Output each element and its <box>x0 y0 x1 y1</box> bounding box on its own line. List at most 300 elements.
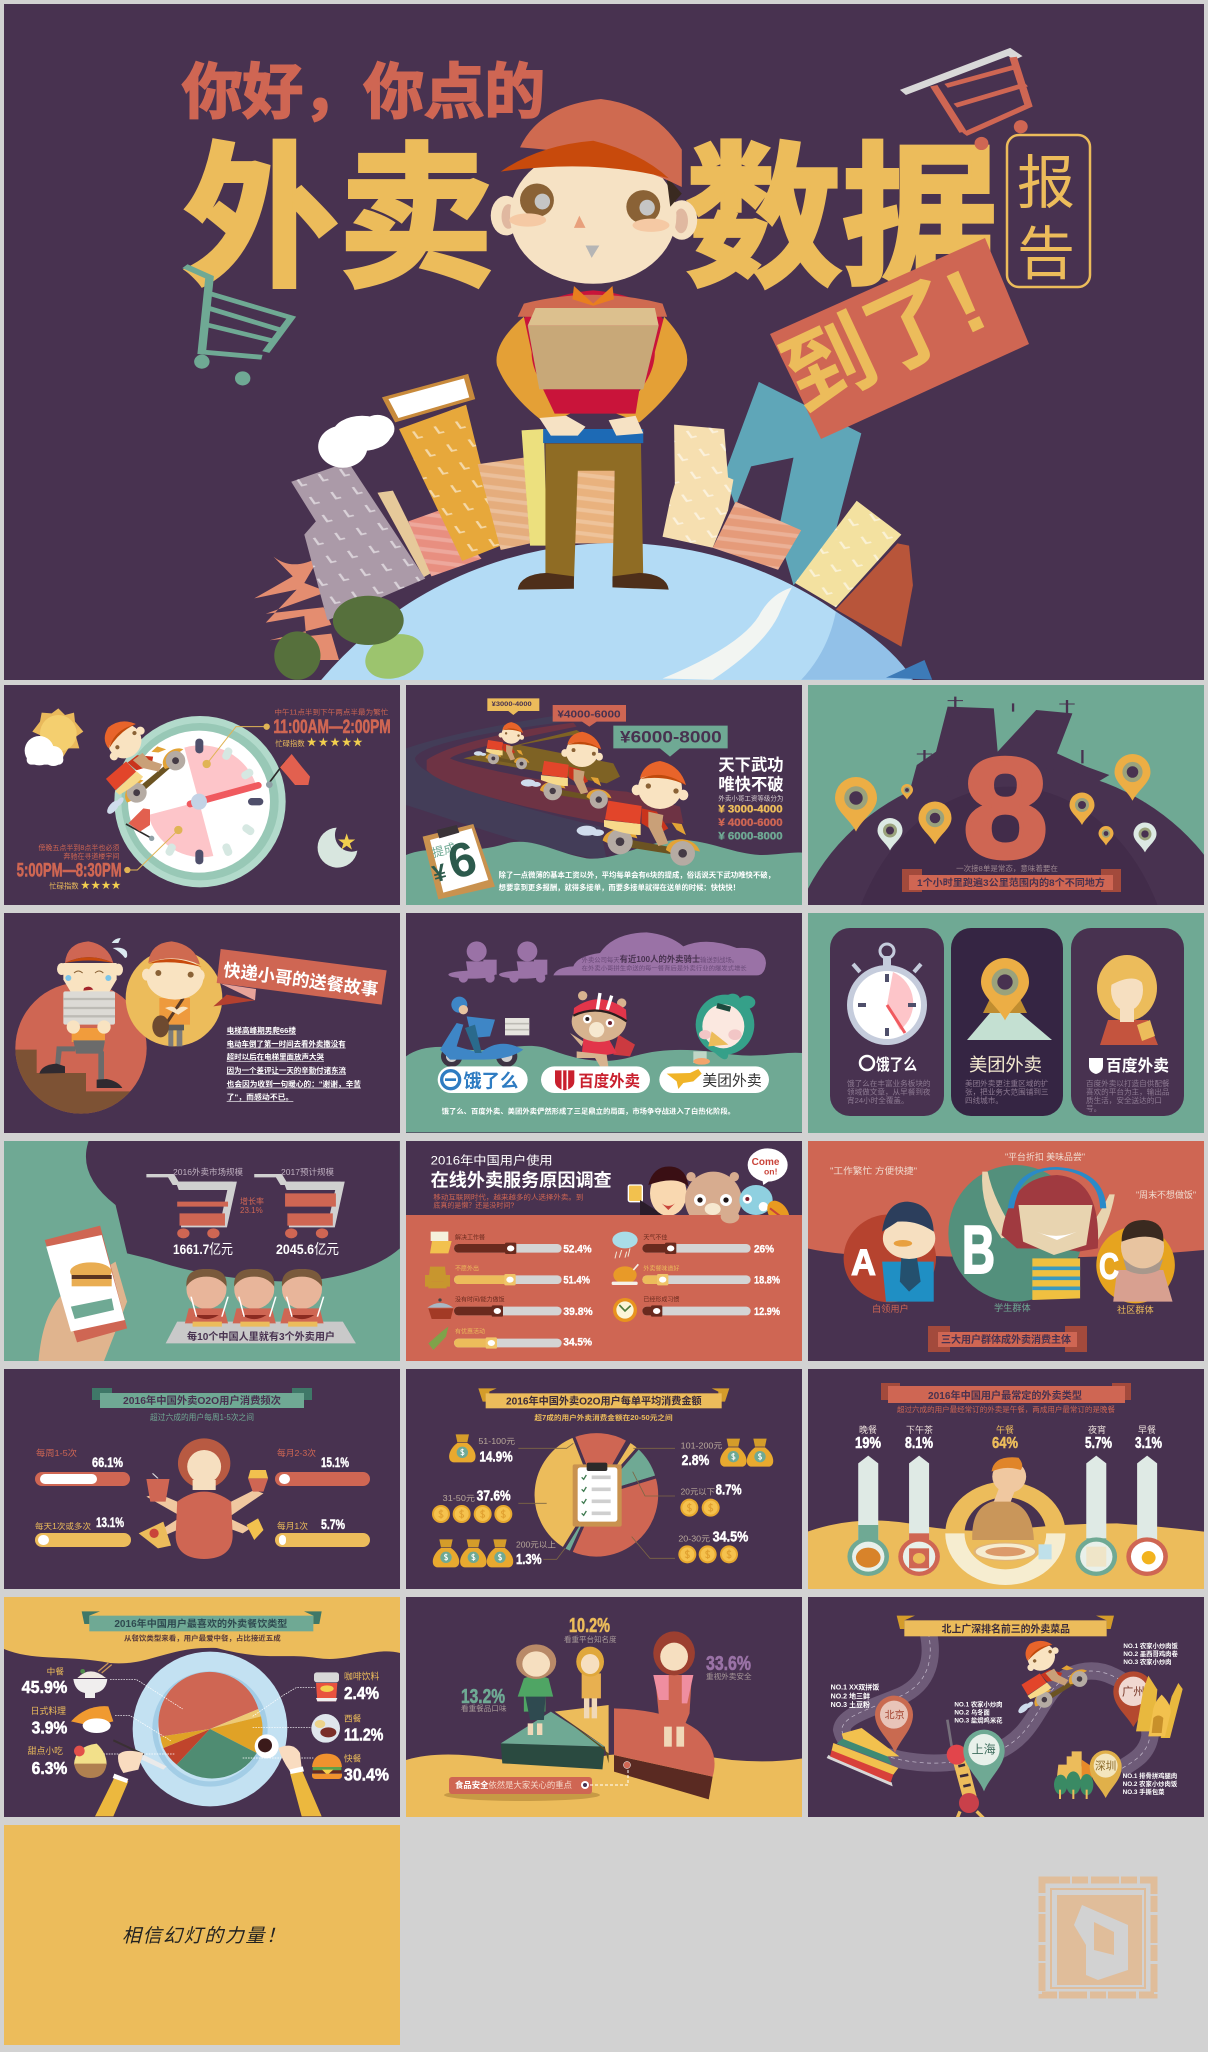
text block: ele.me description: 领域做文章，从早餐到夜 <box>847 1086 931 1096</box>
icon: money bags <box>433 1434 773 1567</box>
pin: guangzhou: 广州 <box>1122 1685 1145 1698</box>
icon: church <box>1136 1676 1183 1738</box>
icon: businesswoman <box>1097 955 1158 1045</box>
text block: afternoon tea <box>905 1424 933 1452</box>
text block: commission description: 想要拿到更多报酬，就得多接单，而要多接单就得在送单的时候：快快快！ <box>499 883 740 892</box>
icon: large rider <box>577 761 700 866</box>
chart: reason work meal <box>454 1234 592 1256</box>
pin: beijing <box>875 1696 913 1753</box>
logo: ele.me <box>860 1055 917 1074</box>
banner: food ribbon: 2016年中国用户最喜欢的外卖餐饮类型 <box>114 1618 288 1630</box>
panel: eight places <box>808 685 1204 905</box>
text block: story lines: 电梯高峰期男爬66楼 <box>227 1026 297 1035</box>
text block: beijing dishes: NO.2 地三鲜 <box>831 1691 870 1700</box>
text block: slogan and salary levels: 唯快不破 <box>718 775 784 794</box>
text block: dinner peak: 忙碌指数 <box>49 881 79 890</box>
text block: fast food <box>344 1752 389 1784</box>
text block: shenzhen dishes: NO.3 手撕包菜 <box>1123 1787 1165 1796</box>
text block: guangzhou dishes: NO.1 农家小炒肉饭 <box>1123 1641 1179 1650</box>
icon: western dish <box>311 1714 340 1743</box>
icon: roast chicken <box>612 1264 638 1285</box>
chart: reason promotion: 34.5% <box>563 1337 592 1349</box>
panel: three user groups <box>808 1141 1204 1361</box>
callout: food safety pill <box>444 1762 630 1801</box>
text: quotes: "平台折扣 美味品尝" <box>1005 1151 1085 1162</box>
text block: lunch: 64% <box>992 1435 1018 1452</box>
icon: scenery and illustration (stretched coordinates) <box>185 52 1028 1317</box>
illustration: speech bubble <box>86 1141 400 1282</box>
chart: reason promotion <box>454 1327 592 1349</box>
logo: meituan pill: 美团外卖 <box>702 1072 762 1089</box>
banner: spend ribbon: 2016年中国外卖O2O用户每单平均消费金额 <box>506 1394 702 1407</box>
callout: medium salary tag: ¥4000-6000 <box>557 709 621 720</box>
icon: clipboard commission: 提成 <box>430 840 457 860</box>
text block: above 200: 1.3% <box>516 1552 542 1568</box>
icon: wall clock <box>613 1298 637 1322</box>
text block: meituan description <box>965 1078 1049 1105</box>
text block: dinner <box>855 1424 881 1452</box>
text block: beijing dishes: NO.3 土豆粉 <box>831 1700 870 1709</box>
title: survey heading: 在线外卖服务原因调查 <box>431 1171 612 1191</box>
banner: main consumers <box>928 1326 1087 1352</box>
text block: dinner peak: 5:00PM—8:30PM <box>17 860 122 881</box>
illustration: bear mascot <box>570 991 635 1066</box>
text block: beijing dishes <box>831 1683 879 1709</box>
callout: medium salary tag <box>553 705 626 727</box>
icon: coins <box>432 1499 738 1563</box>
illustration: green mascot <box>693 994 755 1065</box>
chart: reason weather: 26% <box>754 1244 774 1256</box>
illustration: tired courier <box>39 938 127 1088</box>
chart: reason habit: 已经形成习惯 <box>643 1296 679 1304</box>
panel: favourite meal time <box>808 1369 1204 1589</box>
chart: spend pie <box>533 1432 660 1558</box>
pin: shenzhen <box>1090 1750 1122 1798</box>
banner: places ribbon <box>902 869 1121 892</box>
icon: coffee cup <box>255 1734 279 1758</box>
text block: 33.6 percent <box>706 1653 752 1681</box>
text: quotes: "工作繁忙 方便快捷" <box>830 1165 917 1176</box>
text block: 20-30: 34.5% <box>713 1530 748 1546</box>
illustration: woman left <box>516 1644 556 1735</box>
chart: reason no time: 39.8% <box>563 1306 593 1318</box>
callout: food safety pill: 食品安全依然是大家关心的重点 <box>455 1780 572 1790</box>
text block: baidu description: 百度外卖以打造自供配餐 <box>1086 1078 1170 1088</box>
chart: reason no time <box>454 1296 593 1318</box>
panel: favourite food type <box>4 1597 400 1817</box>
chart: reason habit: 12.9% <box>754 1306 780 1318</box>
text block: 51-100: 51-100元 <box>478 1437 515 1446</box>
text block: cloud message: 在外卖小哥拼生命送的每一餐背后是外卖行业的爆发式增长 <box>582 964 747 972</box>
icon: sushi <box>71 1706 113 1733</box>
text: market values <box>173 1241 339 1257</box>
icon: pearl tower <box>947 1720 985 1820</box>
banner: food ribbon <box>82 1611 322 1631</box>
text block: 31-50 <box>443 1489 511 1505</box>
callout: small salary tag <box>487 698 539 715</box>
illustration: group C community <box>1096 1220 1175 1303</box>
text block: above 200: 200元以上 <box>516 1540 556 1549</box>
illustration: stretched shapes <box>807 1165 1204 1361</box>
text block: shanghai dishes <box>954 1699 1003 1724</box>
pin: shenzhen: 深圳 <box>1095 1760 1116 1772</box>
icon: moon and star <box>318 828 357 868</box>
text block: slogan and salary levels: ¥ 3000-4000 <box>718 804 783 816</box>
text block: lunch: 午餐 <box>996 1424 1014 1435</box>
panel: order frequency <box>4 1369 400 1589</box>
banner: places ribbon: 1个小时里跑遍3公里范围内的8个不同地方 <box>917 877 1106 889</box>
callout: come on bubble: on! <box>764 1166 778 1176</box>
text block: 31-50: 37.6% <box>477 1489 511 1505</box>
panel: courier story <box>4 913 400 1133</box>
panel section: coral body <box>406 1215 802 1361</box>
panel: hero cover <box>4 4 1204 680</box>
text: market values: 2045.6亿元 <box>276 1241 339 1257</box>
text: group letters: A <box>851 1242 876 1283</box>
text block: market labels: 2016外卖市场规模 <box>173 1166 243 1177</box>
pin: shanghai: 上海 <box>972 1742 996 1757</box>
text block: 51-100 <box>478 1437 515 1466</box>
text: group letters: B <box>962 1212 995 1288</box>
text block: lunch peak: 忙碌指数 <box>275 739 305 748</box>
callout: story ribbon <box>213 949 387 1006</box>
text block: 101-200 <box>681 1441 722 1469</box>
icon: clipboard commission <box>423 824 495 899</box>
text block: meituan description: 张，把业务大范围铺到三 <box>965 1086 1049 1096</box>
callout: story ribbon: 快递小哥的送餐故事 <box>222 960 379 1000</box>
chart: reason taste: 18.8% <box>754 1274 780 1286</box>
text block: breakfast <box>1135 1424 1162 1452</box>
banner: city ribbon: 北上广深排名前三的外卖菜品 <box>942 1622 1070 1635</box>
icon: shenzhen skyline and trees <box>1054 1751 1093 1799</box>
title: greeting line: 你好，你点的 <box>182 59 545 126</box>
text block: 51-100: 14.9% <box>479 1450 513 1466</box>
text block: shanghai dishes: NO.3 盐焗鸡米花 <box>954 1715 1003 1724</box>
chart: reason weather <box>642 1234 774 1256</box>
text block: meituan description: 美团外卖更注重区域的扩 <box>965 1078 1049 1088</box>
text: growth rate: 23.1% <box>240 1206 263 1215</box>
text block: baidu description: 质生活，安全送达的口 <box>1086 1095 1162 1105</box>
icon: pot <box>427 1298 453 1319</box>
banner: city ribbon <box>897 1616 1114 1636</box>
illustration: bear chin over edge <box>721 1210 739 1223</box>
text block: shenzhen dishes: NO.2 农家小炒肉饭 <box>1123 1779 1178 1788</box>
pin: guangzhou <box>1113 1671 1153 1727</box>
text block: shanghai dishes: NO.2 乌冬面 <box>954 1707 991 1716</box>
text block: below 20: 20元以下 <box>681 1487 715 1496</box>
illustration: planet <box>230 543 1003 1317</box>
illustration: right hand <box>278 1746 322 1816</box>
illustration: left hand with chopsticks <box>95 1740 167 1816</box>
callout: large salary tag <box>613 726 728 757</box>
pin: beijing: 北京 <box>885 1708 905 1721</box>
text block: guangzhou dishes: NO.2 墨西哥鸡肉卷 <box>1123 1649 1179 1658</box>
report badge: 告 <box>1017 222 1075 287</box>
text block: ele.me description <box>847 1078 931 1105</box>
panel: salary levels <box>406 685 802 905</box>
chart: reason promotion: 有优惠活动 <box>455 1327 485 1335</box>
text block: guangzhou dishes <box>1123 1641 1179 1666</box>
illustration: trees and boat <box>274 596 932 683</box>
illustration: right buildings <box>663 382 913 647</box>
text block: chinese food: 中餐 <box>47 1666 64 1677</box>
panel: closing slide <box>4 1825 400 2045</box>
chart: monthly 2-3 <box>275 1448 370 1486</box>
text block: market caption: 饿了么、百度外卖、美团外卖俨然形成了三足鼎立的局面，市场争夺战进入了白热化阶段。 <box>442 1107 735 1116</box>
text block: slogan and salary levels: 外卖小哥工资等级分为 <box>718 794 783 803</box>
illustration: scooter rider <box>440 997 529 1067</box>
icon: sale tag <box>428 1327 448 1350</box>
icon: clipboard commission: ¥ <box>430 859 450 888</box>
card: meituan <box>951 928 1063 1116</box>
chart: monthly 2-3: 15.1% <box>321 1454 349 1470</box>
panel: top dishes by city <box>808 1597 1204 1817</box>
text block: lunch peak <box>273 707 391 748</box>
callout: large salary tag: ¥6000-8000 <box>620 727 722 746</box>
text block: late night: 夜宵 <box>1088 1424 1106 1435</box>
chart: reason taste: 外卖餐味道好 <box>643 1264 679 1272</box>
logo: ele.me pill: 饿了么 <box>463 1070 518 1091</box>
text block: dinner peak: 奔驰在寻道楼宇间 <box>63 851 119 860</box>
text block: dinner peak <box>17 843 122 890</box>
illustration: group A white-collar <box>844 1202 936 1302</box>
text block: cloud message: 外卖公司每天有近100人的外卖骑士输送到战场。 <box>582 954 738 964</box>
text block: dinner peak: 傍晚五点半到8点半也必须 <box>38 843 119 852</box>
panel: average order spend <box>406 1369 802 1589</box>
text: group names: 白领用户 <box>872 1303 909 1314</box>
illustration: purple lower area <box>807 1248 1204 1361</box>
text block: dessert: 甜点小吃 <box>28 1745 63 1756</box>
icon: watermark logo <box>1038 1876 1158 1998</box>
text block: 13.2 percent <box>461 1686 507 1713</box>
text block: baidu description: 喜欢的平台为主，输出品 <box>1086 1086 1170 1096</box>
illustration: stretched shapes <box>39 1141 400 1361</box>
chart: monthly once: 每月1次 <box>277 1521 309 1531</box>
title: survey heading <box>431 1152 612 1210</box>
text block: lunch <box>992 1424 1018 1452</box>
illustration: delivery man <box>491 99 697 590</box>
text block: japanese food <box>31 1705 67 1738</box>
callout: come on bubble <box>748 1148 788 1185</box>
text block: story lines: 超时以后在电梯里面放声大哭 <box>227 1053 325 1062</box>
report badge <box>1007 135 1090 287</box>
report badge: 报 <box>1017 151 1075 216</box>
icon: folder <box>430 1232 452 1253</box>
text: group names: 社区群体 <box>1117 1304 1154 1315</box>
text block: coffee: 咖啡饮料 <box>344 1671 379 1682</box>
text block: shenzhen dishes: NO.1 排骨拼鸡腿肉 <box>1123 1771 1177 1780</box>
text: users per ten: 每10个中国人里就有3个外卖用户 <box>187 1330 335 1343</box>
logo: baidu pill <box>541 1066 650 1093</box>
icon: coral shopping cart <box>903 52 1028 150</box>
text block: dessert <box>28 1745 67 1778</box>
text block: story lines: 也会因为收到一句暖心的："谢谢，辛苦 <box>227 1079 361 1088</box>
icon: coffee to go <box>314 1672 339 1701</box>
text block: above 200 <box>516 1540 556 1568</box>
text: caption: 一次接8单是常态，意味着要在 <box>956 863 1058 873</box>
text block: story lines: 了"，而感动不已。 <box>227 1093 293 1102</box>
panel: reasons survey <box>406 1141 802 1361</box>
text: group letters <box>851 1212 1119 1288</box>
text block: 31-50: 31-50元 <box>443 1494 475 1503</box>
illustration: road <box>842 1633 1150 1770</box>
chart: reason stay in: 51.4% <box>563 1274 590 1286</box>
illustration: coral circle with stairs <box>15 982 147 1120</box>
text: quotes <box>830 1151 1196 1200</box>
text block: 33.6 percent: 重视外卖安全 <box>706 1671 752 1681</box>
icon: green shopping cart <box>185 266 291 385</box>
illustration: yellow circle courier <box>126 941 222 1046</box>
chart: reason taste <box>642 1264 780 1286</box>
text block: guangzhou dishes: NO.3 农家小炒肉 <box>1123 1657 1172 1666</box>
title: main heading right: 数据 <box>686 133 998 307</box>
logo: ele.me: 饿了么 <box>876 1055 917 1074</box>
chart: reason stay in: 不愿外出 <box>455 1264 479 1272</box>
illustration: green wave <box>406 1046 802 1132</box>
text block: market labels: 2017预计规模 <box>281 1166 334 1177</box>
illustration: speed swooshes <box>406 715 683 860</box>
text block: fast food: 30.4% <box>344 1764 389 1784</box>
icon: map and pin <box>967 958 1052 1040</box>
icon: burger <box>312 1754 342 1779</box>
text block: dinner: 晚餐 <box>859 1424 877 1435</box>
callout: small salary tag: ¥3000-4000 <box>492 702 532 708</box>
chart: monthly once: 5.7% <box>321 1516 345 1532</box>
icon: leader lines <box>125 724 269 873</box>
illustration: woman right <box>653 1631 695 1747</box>
text block: commission description <box>499 870 775 892</box>
text block: 10.2 percent: 10.2% <box>569 1615 610 1637</box>
text block: cloud message <box>582 954 747 972</box>
text block: 13.2 percent: 13.2% <box>461 1686 505 1708</box>
text: subheading: 超7成的用户外卖消费金额在20-50元之间 <box>534 1413 673 1422</box>
icon: clipboard checklist <box>573 1463 622 1527</box>
text block: slogan and salary levels: ¥ 4000-6000 <box>718 817 783 829</box>
chart: daily once or more <box>35 1514 131 1547</box>
text block: fast food: 快餐 <box>344 1752 362 1763</box>
text block: 13.2 percent: 看重餐品口味 <box>461 1703 507 1713</box>
text block: lunch peak: 中午11点半到下午两点半最为繁忙 <box>274 707 388 716</box>
icon: map pins <box>835 754 1156 852</box>
chart: clock face <box>114 716 286 887</box>
logo: baidu: 百度外卖 <box>1106 1056 1169 1075</box>
chart: monthly once <box>275 1516 370 1547</box>
panel: market size <box>4 1141 400 1361</box>
panel: three platforms <box>406 913 802 1133</box>
text block: late night <box>1085 1424 1112 1452</box>
text: subheading: 从餐饮类型来看，用户最爱中餐，占比接近五成 <box>124 1634 281 1643</box>
text: group names: 学生群体 <box>994 1302 1031 1313</box>
text block: below 20 <box>681 1482 742 1498</box>
callout: tilted arrived banner: 到了! <box>768 251 1001 430</box>
illustration: green wave <box>406 840 802 905</box>
text block: 33.6 percent: 33.6% <box>706 1653 751 1675</box>
banner: main consumers: 三大用户群体成外卖消费主体 <box>941 1333 1071 1346</box>
text block: shenzhen dishes <box>1123 1771 1178 1796</box>
banner: meal ribbon: 2016年中国用户最常定的外卖类型 <box>928 1389 1082 1402</box>
chart: monthly 2-3: 每月2-3次 <box>277 1448 317 1458</box>
chart: plate pie <box>133 1652 287 1806</box>
text: subheading: 超过六成的用户最经常订的外卖是午餐，两成用户最常订的是晚餐 <box>897 1404 1115 1414</box>
chart: reason stay in <box>454 1264 590 1286</box>
icon: flags <box>126 754 310 841</box>
chart: reason weather: 天气不佳 <box>643 1234 667 1242</box>
illustration: yellow hills <box>807 1521 1204 1589</box>
icon: rain cloud <box>612 1232 638 1258</box>
illustration: left buildings <box>291 376 615 620</box>
illustration: lunch ring and man <box>945 1457 1065 1585</box>
icon: scooter silhouettes <box>448 941 547 983</box>
banner: frequency ribbon: 2016年中国外卖O2O用户消费频次 <box>123 1394 281 1407</box>
text block: coffee: 2.4% <box>344 1683 379 1703</box>
chart: reason no time: 没有时间/能力做饭 <box>455 1296 505 1304</box>
chart: weekly 1-5: 每周1-5次 <box>36 1448 78 1458</box>
icon: rider <box>990 1627 1093 1729</box>
text: growth rate: 增长率 <box>240 1196 264 1206</box>
text: group letters: C <box>1099 1246 1119 1287</box>
icon: armchair <box>425 1267 450 1288</box>
text block: afternoon tea: 下午茶 <box>906 1424 933 1435</box>
text block: dinner: 19% <box>855 1435 881 1452</box>
text block: story lines <box>227 1026 361 1102</box>
title: main heading left: 外卖 <box>183 133 494 307</box>
logo: baidu pill: 百度外卖 <box>578 1071 640 1090</box>
illustration: purple cloud <box>553 932 766 975</box>
icon: rider <box>66 703 192 831</box>
text block: dessert: 6.3% <box>32 1758 67 1778</box>
text block: story lines: 电动车倒了第一时间去看外卖撒没有 <box>227 1039 346 1048</box>
illustration: stretched shapes <box>406 1631 803 1817</box>
icon: leader dots <box>103 1680 315 1758</box>
text block: slogan and salary levels <box>718 757 784 842</box>
text block: 10.2 percent <box>564 1615 617 1644</box>
text block: story lines: 因为一个差评让一天的辛勤付诸东流 <box>227 1066 347 1075</box>
chart: weekly 1-5: 66.1% <box>92 1454 123 1470</box>
chart: reason work meal: 解决工作餐 <box>455 1234 485 1242</box>
text block: japanese food: 3.9% <box>32 1718 67 1738</box>
illustration: city dome <box>786 697 1208 1213</box>
icon: carts <box>146 1176 233 1238</box>
text block: chinese food <box>22 1666 67 1697</box>
text block: chinese food: 45.9% <box>22 1677 67 1697</box>
banner: frequency ribbon <box>92 1388 312 1408</box>
panel: platform cards <box>808 913 1204 1133</box>
icon: clipboard commission: 6 <box>442 831 482 890</box>
callout: come on bubble: Come <box>752 1157 780 1168</box>
illustration: group B student <box>948 1165 1115 1302</box>
logo: ele.me pill <box>438 1066 528 1093</box>
icon: sun and cloud <box>25 708 83 766</box>
text block: japanese food: 日式料理 <box>31 1705 66 1716</box>
text block: market labels <box>173 1166 334 1177</box>
chart: reason habit <box>642 1296 780 1318</box>
banner: spend ribbon <box>478 1388 729 1408</box>
text block: slogan and salary levels: 天下武功 <box>718 757 784 775</box>
icon: rice bowl <box>73 1663 112 1698</box>
logo: baidu <box>1089 1056 1169 1075</box>
text block: western food <box>344 1713 383 1744</box>
chart: reason work meal: 52.4% <box>563 1244 592 1256</box>
illustration: stretched shapes <box>807 1456 1204 1589</box>
text block: coffee <box>344 1671 379 1703</box>
illustration: hand and phone <box>39 1226 127 1361</box>
text block: breakfast: 早餐 <box>1138 1424 1156 1435</box>
text: quotes: "周末不想做饭" <box>1136 1189 1196 1200</box>
panel: food safety <box>406 1597 802 1817</box>
text block: western food: 11.2% <box>344 1724 383 1744</box>
logo: meituan: 美团外卖 <box>969 1055 1042 1075</box>
card: baidu <box>1071 928 1184 1116</box>
